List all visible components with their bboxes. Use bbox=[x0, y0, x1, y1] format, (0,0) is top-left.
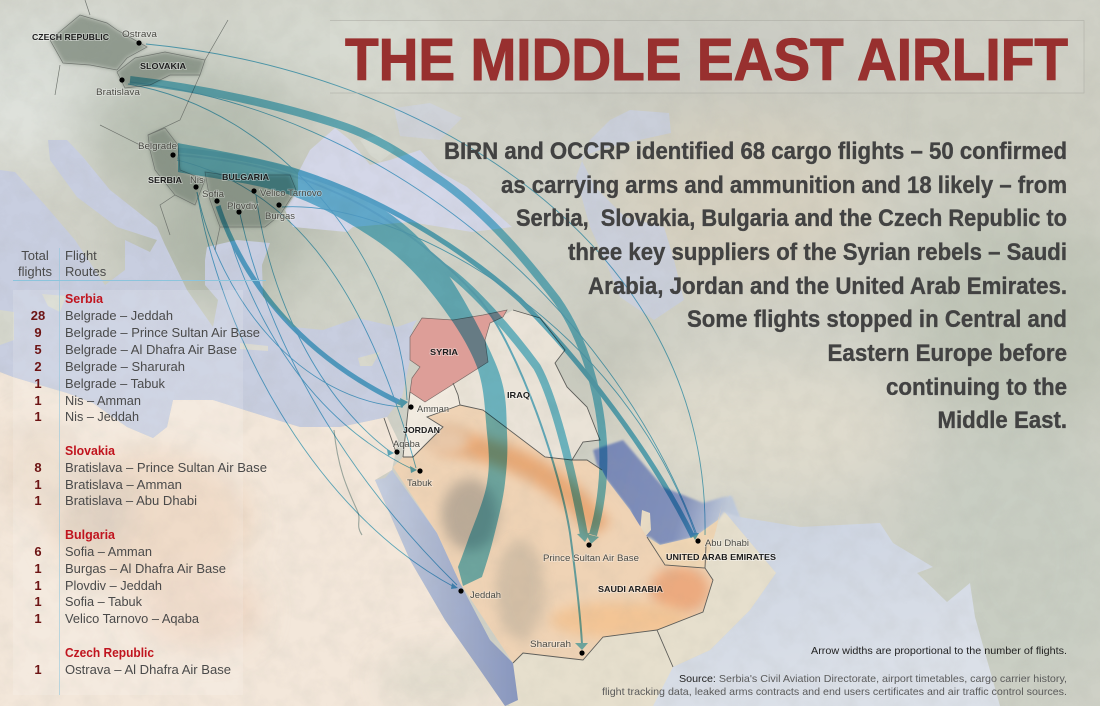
borders: Europe bbox=[50, 0, 296, 250]
group: Bulgaria: Sofia – Tabuk bbox=[65, 594, 142, 609]
group: Serbia: Nis – Jeddah bbox=[65, 409, 139, 424]
Qatar bbox=[640, 510, 651, 537]
map labels: CZECH REPUBLIC bbox=[32, 32, 109, 42]
arrow head: Sharurah bbox=[575, 643, 588, 650]
table header: total flights bbox=[18, 248, 52, 279]
arrow: Velico Tarnovo to Aqaba bbox=[256, 195, 392, 453]
group: Bulgaria: Sofia – Amman bbox=[65, 544, 152, 559]
group: Slovakia: 8 bbox=[34, 460, 42, 475]
map labels: JORDAN bbox=[403, 425, 440, 435]
group: Serbia: Belgrade – Al Dhafra Air Base bbox=[65, 342, 237, 357]
intro text: three key suppliers of the Syrian rebels – Saudi bbox=[568, 239, 1067, 266]
map labels: Prince Sultan Air Base bbox=[543, 553, 639, 564]
group: Bulgaria: 1 bbox=[34, 611, 42, 626]
group: Bulgaria: 6 bbox=[34, 544, 42, 559]
group: Serbia: Belgrade – Jeddah bbox=[65, 308, 173, 323]
map labels: Jeddah bbox=[470, 590, 501, 601]
table header: total flights: flights bbox=[18, 264, 52, 279]
Nile bbox=[334, 430, 362, 535]
arrow: Bratislava to Prince Sultan Air Base bbox=[130, 80, 603, 535]
map labels: Abu Dhabi bbox=[705, 538, 749, 549]
group: Serbia: Belgrade – Sharurah bbox=[65, 359, 185, 374]
map labels: Plovdiv bbox=[227, 201, 258, 212]
table header: flight routes bbox=[65, 248, 107, 279]
group: Bulgaria: Bulgaria bbox=[65, 527, 116, 542]
map labels: SERBIA bbox=[148, 175, 182, 185]
intro text: Middle East. bbox=[938, 407, 1067, 434]
group: Slovakia: Bratislava – Abu Dhabi bbox=[65, 493, 197, 508]
map labels: Velico Tarnovo bbox=[260, 188, 322, 199]
group: Slovakia: Bratislava – Prince Sultan Air Base bbox=[65, 460, 267, 475]
land: Jordan bbox=[403, 383, 460, 457]
group: Serbia: Nis – Amman bbox=[65, 393, 141, 408]
sea: Mediterranean bbox=[0, 140, 417, 438]
sea: Black Sea and Azov bbox=[285, 103, 512, 232]
arrow: Belgrade to Jeddah bbox=[178, 143, 507, 586]
country: Bulgaria bbox=[205, 172, 296, 227]
country: Serbia bbox=[148, 128, 205, 205]
arrow: Sofia to Tabuk bbox=[220, 205, 414, 470]
country: Slovakia bbox=[117, 52, 205, 88]
map labels: SAUDI ARABIA bbox=[598, 584, 663, 594]
group: Serbia: 5 bbox=[34, 342, 42, 357]
group: Bulgaria: Velico Tarnovo – Aqaba bbox=[65, 611, 200, 626]
source: Source: Serbia's Civil Aviation Directorate, airport timetables, cargo carrier history, bbox=[679, 673, 1067, 685]
intro text: Eastern Europe before bbox=[828, 340, 1067, 367]
source: flight tracking data, leaked arms contracts and end users certificates and air traffic control sources. bbox=[602, 686, 1067, 698]
arrow: Belgrade to Sharurah bbox=[178, 155, 582, 644]
arrow: Belgrade to Tabuk bbox=[177, 160, 416, 468]
table header: total flights: Total bbox=[21, 248, 49, 263]
group: Serbia: 1 bbox=[34, 376, 42, 391]
title: THE MIDDLE EAST AIRLIFT bbox=[345, 27, 1068, 93]
group: Bulgaria: 1 bbox=[34, 578, 42, 593]
table header: flight routes: Routes bbox=[65, 264, 107, 279]
arrow head: Prince Sultan from Bratislava bbox=[586, 534, 599, 544]
map labels: UNITED ARAB EMIRATES bbox=[666, 552, 776, 562]
arrow: Sofia to Amman bbox=[218, 206, 403, 404]
group: Bulgaria: 1 bbox=[34, 561, 42, 576]
map labels: Nis bbox=[190, 175, 204, 186]
group: Czech Republic: 1 bbox=[34, 662, 42, 677]
land: North Africa bbox=[0, 372, 505, 706]
group: Serbia: 28 bbox=[31, 308, 45, 323]
borders: Middle East bbox=[384, 310, 713, 667]
group: Slovakia bbox=[34, 443, 267, 508]
group: Czech Republic: Ostrava – Al Dhafra Air Base bbox=[65, 662, 231, 677]
arrow: Bratislava to Abu Dhabi bbox=[130, 82, 697, 535]
arrow: Belgrade to Al Dhafra Air Base bbox=[178, 150, 693, 537]
arrow: Belgrade to Prince Sultan Air Base bbox=[178, 155, 584, 535]
map labels: Belgrade bbox=[138, 141, 177, 152]
table header: flight routes: Flight bbox=[65, 248, 97, 263]
group: Bulgaria: 1 bbox=[34, 594, 42, 609]
group: Bulgaria: Burgas – Al Dhafra Air Base bbox=[65, 561, 226, 576]
map labels: BULGARIA bbox=[222, 172, 269, 182]
intro text: continuing to the bbox=[886, 374, 1067, 401]
group: Slovakia: 1 bbox=[34, 493, 42, 508]
arrow: Burgas to Al Dhafra Air Base bbox=[282, 207, 695, 533]
map labels: Burgas bbox=[265, 211, 295, 222]
group: Serbia: 1 bbox=[34, 393, 42, 408]
flight arrows bbox=[128, 44, 705, 650]
intro text: Some flights stopped in Central and bbox=[687, 306, 1067, 333]
map labels: Amman bbox=[417, 404, 449, 415]
land: Saudi Arabia bbox=[393, 405, 713, 663]
group: Serbia: 9 bbox=[34, 325, 42, 340]
title panel bbox=[330, 20, 1084, 93]
sea: Arabian Sea bbox=[640, 495, 1000, 706]
map labels: Bratislava bbox=[96, 87, 141, 98]
group: Serbia: 1 bbox=[34, 409, 42, 424]
group: Czech Republic: Czech Republic bbox=[65, 645, 154, 660]
map labels: Aqaba bbox=[393, 439, 421, 450]
group: Slovakia: Bratislava – Amman bbox=[65, 477, 182, 492]
arrow heads: small bbox=[387, 398, 699, 589]
intro text: as carrying arms and ammunition and 18 likely – from bbox=[501, 172, 1067, 199]
arrow: Ostrava to Al Dhafra Air Base bbox=[146, 44, 705, 535]
intro text bbox=[444, 138, 1067, 434]
group: Slovakia: 1 bbox=[34, 477, 42, 492]
map labels: Sharurah bbox=[530, 639, 571, 650]
city markers bbox=[119, 40, 701, 656]
sea: Persian Gulf bbox=[593, 440, 740, 545]
Central Europe highlighted countries bbox=[50, 15, 296, 227]
arrow head: Prince Sultan from Belgrade bbox=[577, 533, 590, 542]
map labels: Sofia bbox=[202, 189, 225, 200]
intro text: BIRN and OCCRP identified 68 cargo flights – 50 confirmed bbox=[444, 138, 1067, 165]
map labels: SLOVAKIA bbox=[140, 61, 186, 71]
land: Arabian Peninsula south and east bbox=[480, 510, 776, 706]
arrow: Plovdiv to Jeddah bbox=[240, 214, 457, 585]
group: Slovakia: Slovakia bbox=[65, 443, 116, 458]
country: Syria bbox=[410, 310, 507, 402]
map labels: Ostrava bbox=[122, 29, 158, 40]
country: Czech Republic bbox=[50, 15, 147, 70]
note: arrow widths: Arrow widths are proportional to the number of flights. bbox=[811, 645, 1067, 657]
group: Czech Republic bbox=[34, 645, 231, 677]
group: Bulgaria bbox=[34, 527, 226, 626]
group: Serbia: Serbia bbox=[65, 291, 104, 306]
group: Serbia: Belgrade – Prince Sultan Air Base bbox=[65, 325, 260, 340]
arrow: Nis to Amman bbox=[197, 192, 403, 407]
group: Serbia: 2 bbox=[34, 359, 42, 374]
source bbox=[602, 673, 1067, 698]
group: Serbia bbox=[31, 291, 260, 424]
arrow: Nis to Jeddah bbox=[197, 192, 456, 588]
sea: Caspian bbox=[576, 110, 684, 320]
flight table bbox=[13, 248, 267, 695]
map labels: IRAQ bbox=[507, 390, 530, 400]
land: UAE bbox=[647, 505, 722, 568]
arrow: Bratislava to Amman bbox=[128, 84, 407, 400]
land: Iraq bbox=[453, 310, 600, 460]
map labels bbox=[32, 29, 776, 650]
group: Serbia: Belgrade – Tabuk bbox=[65, 376, 165, 391]
group: Bulgaria: Plovdiv – Jeddah bbox=[65, 578, 162, 593]
sea: Red Sea bbox=[375, 470, 518, 706]
intro text: Arabia, Jordan and the United Arab Emirates. bbox=[588, 273, 1067, 300]
map labels: SYRIA bbox=[430, 347, 458, 357]
map labels: Tabuk bbox=[407, 478, 432, 489]
